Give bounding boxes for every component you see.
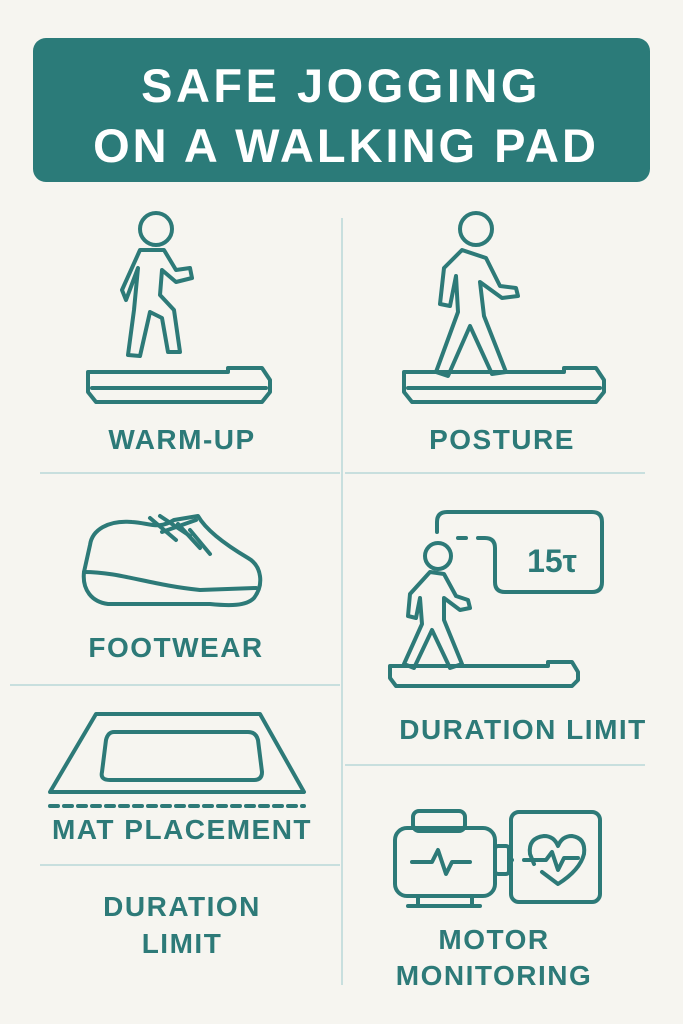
label: mat placement: MAT PLACEMENT bbox=[52, 814, 312, 845]
icon: posture walker bbox=[404, 213, 604, 402]
title: SAFE JOGGING bbox=[141, 59, 541, 112]
icon: mat bbox=[50, 714, 304, 806]
icon: warm-up jogger bbox=[88, 213, 270, 402]
icon: duration timer walker bbox=[390, 512, 602, 686]
label: duration limit left bbox=[103, 891, 261, 959]
label: duration limit right: DURATION LIMIT bbox=[399, 714, 647, 745]
icon: shoe bbox=[84, 516, 260, 605]
label: footwear: FOOTWEAR bbox=[88, 632, 264, 663]
label: motor monitoring: MOTOR bbox=[438, 924, 550, 955]
label: motor monitoring: MONITORING bbox=[396, 960, 592, 991]
label: posture: POSTURE bbox=[429, 424, 575, 455]
label: warm-up: WARM-UP bbox=[108, 424, 256, 455]
icon: motor monitoring bbox=[395, 811, 600, 906]
title: ON A WALKING PAD bbox=[93, 119, 599, 172]
label: 15t timer: 15τ bbox=[527, 543, 577, 579]
label: motor monitoring bbox=[396, 924, 592, 991]
label: duration limit left: LIMIT bbox=[142, 928, 222, 959]
title bbox=[33, 38, 650, 182]
label: duration limit left: DURATION bbox=[103, 891, 261, 922]
